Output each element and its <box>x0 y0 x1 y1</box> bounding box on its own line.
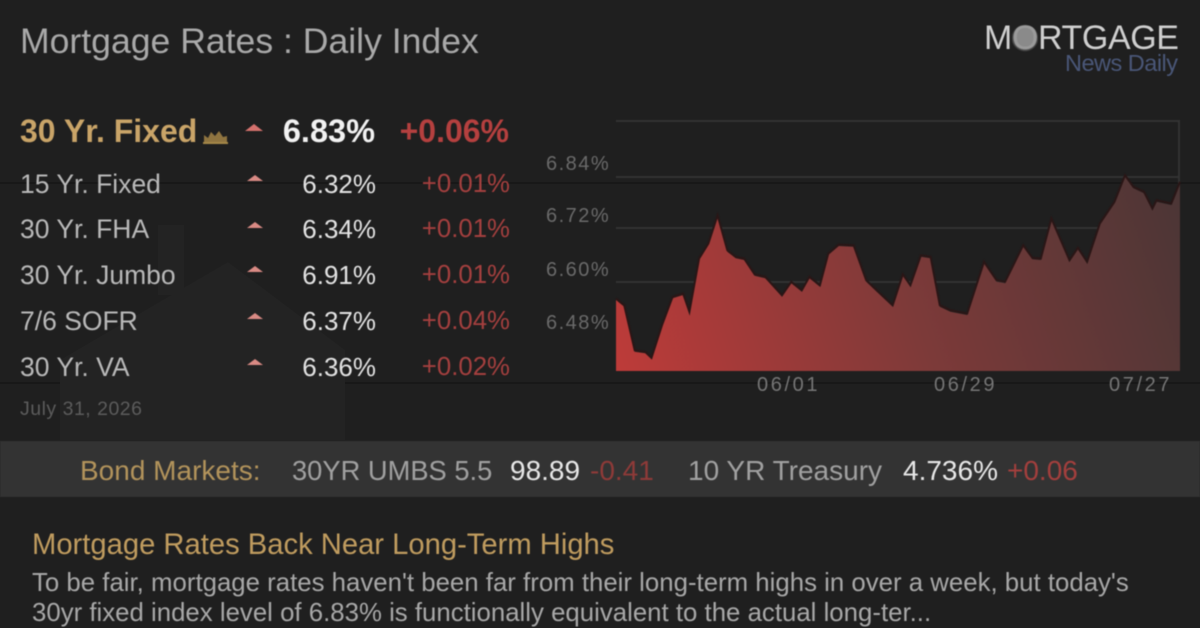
rates table: 6.32% <box>302 169 376 199</box>
rates table: +0.01% <box>422 170 510 198</box>
y axis labels <box>546 153 610 334</box>
x axis labels: 07/27 <box>1109 374 1172 396</box>
title: Mortgage Rates : Daily Index <box>20 21 479 61</box>
date: July 31, 2026 <box>20 398 143 420</box>
x axis labels: 06/01 <box>757 374 820 396</box>
treasury quote <box>688 455 1078 487</box>
rates table: 6.37% <box>302 306 376 336</box>
UMBS quote <box>292 455 654 486</box>
y axis labels: 6.72% <box>546 205 610 227</box>
logo subtitle: News Daily <box>1065 50 1178 76</box>
article text <box>32 569 1129 628</box>
article text: 30yr fixed index level of 6.83% is functionally equivalent to the actual long-ter... <box>32 599 931 627</box>
UMBS quote: -0.41 <box>590 455 654 486</box>
row: 30 Yr. Fixed <box>20 113 509 149</box>
row: 15 Yr. Fixed: 15 Yr. Fixed <box>20 169 161 199</box>
row: 7/6 SOFR: 7/6 SOFR <box>20 306 138 336</box>
rates table: +0.01% <box>422 215 510 243</box>
bond markets label: Bond Markets: <box>80 455 261 486</box>
rates table: +0.02% <box>422 353 510 381</box>
y axis labels: 6.84% <box>546 153 610 175</box>
treasury quote: 10 YR Treasury <box>688 455 882 486</box>
icon: mini chart <box>202 130 229 145</box>
row: 30 Yr. Fixed: 30 Yr. Fixed <box>20 113 197 149</box>
UMBS quote: 98.89 <box>510 455 580 486</box>
rates table: 6.36% <box>302 352 376 382</box>
row: 30 Yr. Fixed: 6.83% <box>283 113 375 149</box>
treasury quote: 4.736% <box>903 455 998 486</box>
rates table: 6.34% <box>302 214 376 244</box>
row: 30 Yr. VA: 30 Yr. VA <box>20 352 130 382</box>
area series <box>616 177 1180 371</box>
y axis labels: 6.48% <box>546 312 610 334</box>
treasury quote: +0.06 <box>1007 455 1078 486</box>
background house silhouette <box>60 382 345 384</box>
logo wordmark: MORTGAGE <box>984 19 1179 57</box>
x axis labels <box>757 374 1172 396</box>
rates table: +0.01% <box>422 261 510 289</box>
UMBS quote: 30YR UMBS 5.5 <box>292 455 492 486</box>
area chart <box>546 120 1180 396</box>
x axis labels: 06/29 <box>934 374 997 396</box>
y axis labels: 6.60% <box>546 259 610 281</box>
row: 30 Yr. Fixed: +0.06% <box>400 113 509 149</box>
article text: To be fair, mortgage rates haven't been far from their long-term highs in over a week, but today's <box>32 569 1129 597</box>
rates table: +0.04% <box>422 307 510 335</box>
article headline: Mortgage Rates Back Near Long-Term Highs <box>32 529 614 561</box>
bond markets bar <box>0 441 1200 497</box>
row: 30 Yr. Jumbo: 30 Yr. Jumbo <box>20 260 176 290</box>
rates table: 6.91% <box>302 260 376 290</box>
rates table <box>20 113 510 420</box>
logo: Mortgage News Daily <box>984 19 1179 76</box>
row: 30 Yr. FHA: 30 Yr. FHA <box>20 214 149 244</box>
